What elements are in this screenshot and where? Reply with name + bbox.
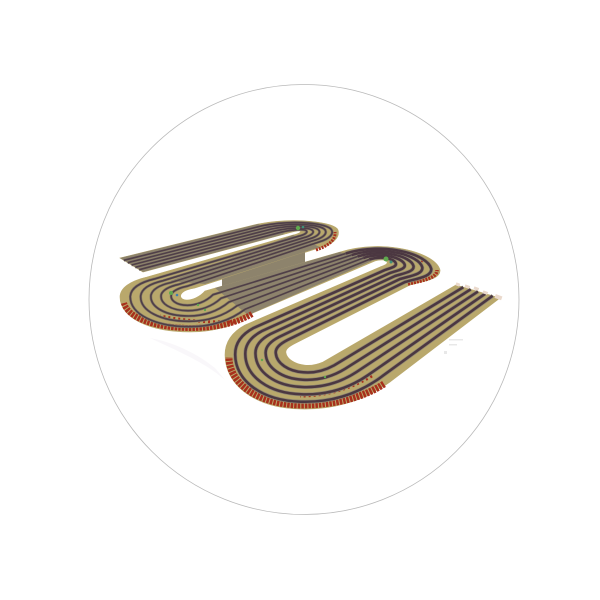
circle outline [89,84,519,514]
tube bundle body [120,221,500,409]
faint marks near tube ends [444,339,463,354]
green and blue specks at bend tips [169,226,392,378]
dark gaps, rear legs [124,223,369,327]
serpentine tube bundle [120,221,502,409]
red outer bend patches [124,224,437,405]
soft floor shadow [150,338,225,380]
grey tone on rear legs [120,224,372,315]
pale tube end caps [455,282,502,300]
dark gaps, front legs [124,223,493,402]
closure between legs three and four [222,252,305,286]
